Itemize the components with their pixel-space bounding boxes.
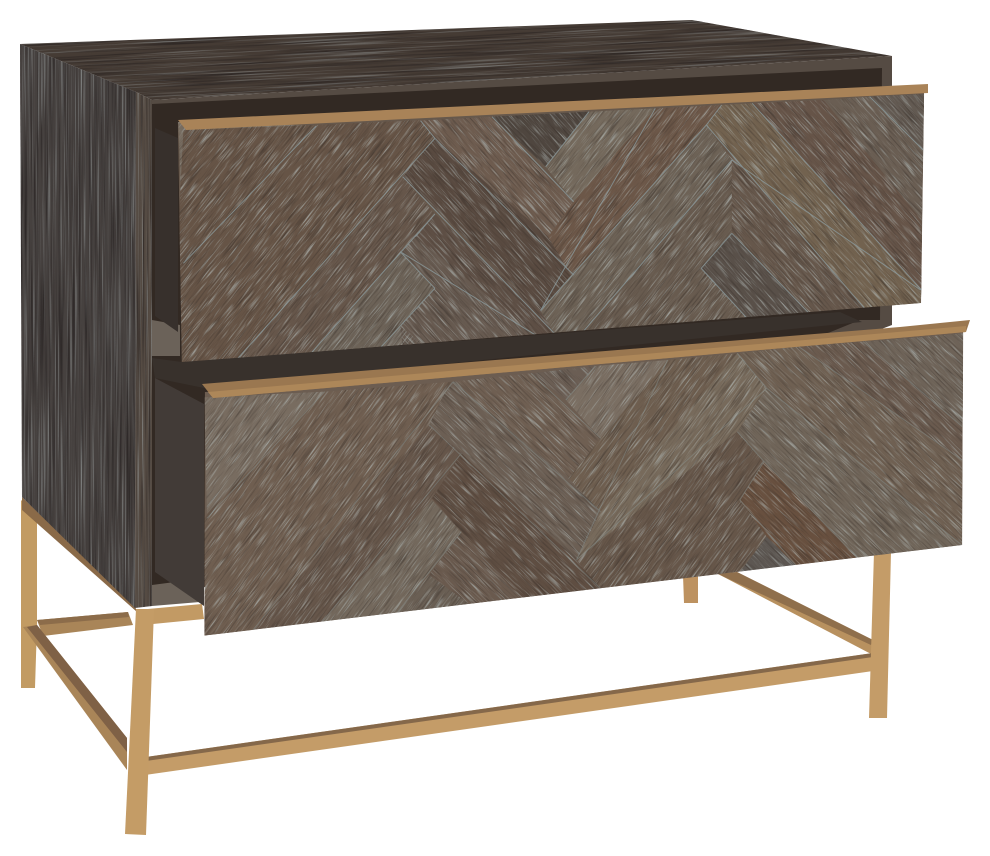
rear brass legs and rails — [21, 500, 873, 688]
bottom drawer interior shadow — [152, 312, 862, 388]
top drawer plank seams — [183, 97, 923, 359]
bottom drawer brass handle rail — [202, 320, 970, 398]
cabinet front frame and interior — [135, 56, 892, 608]
bottom drawer front with herringbone planks — [204, 331, 968, 636]
cabinet left side — [20, 44, 136, 608]
bottom drawer plank seams — [207, 342, 962, 631]
cabinet top — [20, 20, 892, 100]
left front brass leg — [125, 609, 154, 835]
top drawer inner side — [155, 128, 178, 332]
top drawer front with herringbone planks — [177, 92, 924, 363]
left diagonal brass rail — [23, 625, 127, 770]
brass apron under cabinet — [137, 604, 204, 624]
front brass rail — [145, 653, 880, 775]
bottom drawer inner side — [155, 378, 204, 606]
right front brass leg — [869, 552, 891, 718]
brass strip under left side — [22, 497, 137, 612]
top drawer brass handle rail — [178, 84, 928, 130]
